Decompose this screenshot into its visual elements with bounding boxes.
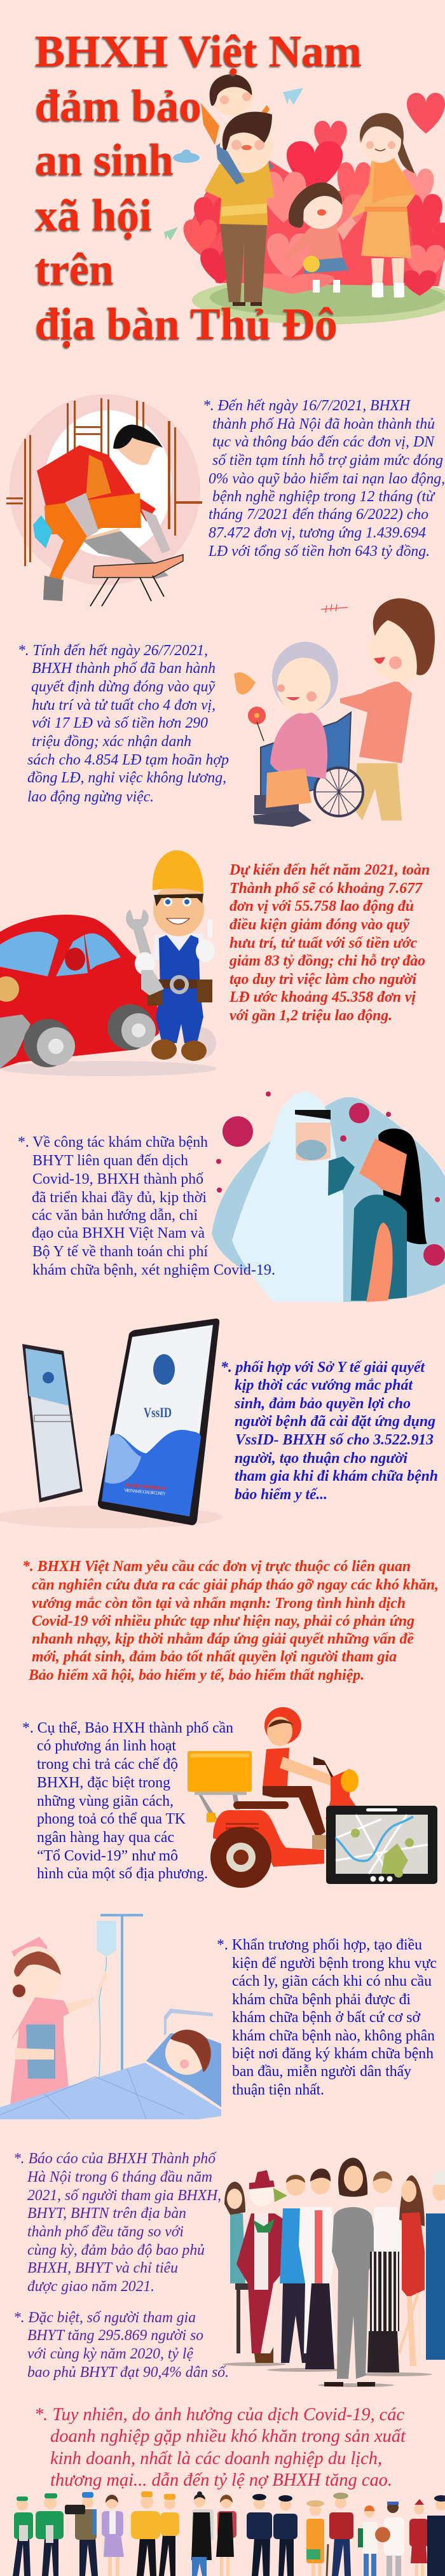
hearts cluster [184, 93, 445, 296]
doctor with white coat [299, 2168, 337, 2369]
text: BHYT coverage: *. Đặc biệt, số người tham gia [13, 2309, 196, 2326]
cook [358, 2505, 378, 2576]
text: urgent coordination: khám chữa bệnh phải được đi [232, 1991, 411, 2008]
red car [0, 915, 159, 1069]
text: 26/7/2021 pension: sách cho 4.854 LĐ tạm hoãn hợp [27, 752, 229, 768]
text: flexible payment: những vùng giãn cách, [37, 1793, 174, 1810]
text: covid treatment: đã triển khai đầy đủ, kịp thời [32, 1189, 207, 1206]
gardener [306, 2500, 324, 2576]
text: BHYT coverage: bao phủ BHYT đạt 90,4% dân số. [27, 2364, 229, 2381]
text: VssID coordination: tham gia khi đi khám chữa bệnh [235, 1468, 438, 1485]
text: 26/7/2021 pension: triệu đồng; xác nhận danh [32, 733, 191, 750]
police officer 2 [273, 2495, 298, 2576]
text: 6-month report: BHXH, BHYT và chỉ tiêu [27, 2260, 178, 2276]
text: urgent coordination: kiện để người bệnh trong khu vực [232, 1955, 437, 1972]
sawhorse [90, 555, 183, 606]
waitress [216, 2495, 236, 2576]
protective suit [232, 1091, 343, 1302]
text: 26/7/2021 pension: với 17 LĐ và số tiền hơn 290 [32, 715, 208, 731]
text: 26/7/2021 pension: lao động ngừng việc. [27, 789, 154, 805]
chef with striped apron [367, 2171, 406, 2372]
text: BHXH Vietnam request: Bảo hiểm xã hội, bảo hiểm y tế, bảo hiểm thất nghiệp. [28, 1667, 364, 1684]
father [205, 112, 274, 306]
text: 16/7/2021 support: 87.472 đơn vị, tương ứng 1.439.694 [209, 525, 426, 541]
text: 6-month report: thành phố đều tăng so với [27, 2224, 184, 2240]
text: BHYT coverage [13, 2309, 229, 2381]
illustration: row of workers [13, 2491, 445, 2576]
text: urgent coordination: cách ly, giãn cách khi có nhu cầu [232, 1973, 432, 1990]
text: 16/7/2021 support: 0% vào quỹ bảo hiểm tai nạn lao động, [209, 471, 445, 487]
police officer 1 [247, 2494, 272, 2576]
text: 6-month report: Hà Nội trong 6 tháng đầu năm [27, 2169, 212, 2185]
paper planes and cloud [164, 88, 303, 240]
text: urgent coordination: thuận tiện nhất. [232, 2082, 324, 2098]
IV stand [97, 1914, 143, 2077]
wheelchair [253, 712, 363, 827]
text: 16/7/2021 support: bệnh nghề nghiệp trong 12 tháng (từ [212, 488, 435, 505]
worker: yellow shirt 1 [131, 2491, 160, 2576]
text: VssID coordination [221, 1359, 438, 1503]
illustration: happy family [164, 73, 445, 324]
text: BHXH Vietnam request: *. BHXH Việt Nam yêu cầu các đơn vị trực thuộc có liên quan [22, 1558, 411, 1575]
text: BHXH Vietnam request: Covid-19 với nhiều phức tạp như hiện nay, phải có phản ứng [32, 1613, 414, 1630]
text: flexible payment: BHXH, đặc biệt trong [37, 1775, 170, 1791]
text: 16/7/2021 support [203, 398, 445, 560]
text: 16/7/2021 support: tháng 7/2021 đến tháng 6/2022) cho [209, 506, 428, 523]
worker: yellow shirt 2 [159, 2494, 179, 2576]
shadow under car [0, 1027, 216, 1076]
text: flexible payment: phong toả có thể qua TK [37, 1811, 186, 1827]
caregiver [340, 599, 435, 821]
text: covid treatment: *. Về công tác khám chữa bệnh [18, 1134, 208, 1151]
text: VssID coordination: VssID- BHXH số cho 3.522.913 [235, 1432, 434, 1448]
text: 16/7/2021 support: *. Đến hết ngày 16/7/2021, BHXH [203, 398, 411, 414]
text: BHXH Vietnam request: cần nghiên cứu đưa ra các giải pháp tháo gỡ ngay các khó khăn, [32, 1577, 439, 1593]
text: debt conclusion: *. Tuy nhiên, do ảnh hưởng của dịch Covid-19, các [34, 2405, 405, 2425]
text: BHYT coverage: BHYT tăng 295.869 người so [27, 2327, 203, 2344]
text: BHXH Vietnam request: mới, phát sinh, đảm bảo tốt nhất quyền lợi người tham gia [32, 1649, 397, 1665]
tablet: BẢO HIỂM XÃ HỘI VIỆT NAM [125, 1483, 168, 1492]
text: 6-month report: cùng kỳ, đảm bảo độ bao phủ [27, 2242, 205, 2259]
text: VssID coordination: người bệnh đã cài đặt ứng dụng [235, 1413, 435, 1430]
text: BHXH Vietnam request [22, 1558, 439, 1684]
text: debt conclusion: thương mại... dẫn đến tỷ lệ nợ BHXH tăng cao. [50, 2470, 392, 2490]
patient in bed [0, 2030, 221, 2119]
text: BHXH Vietnam request: nhanh nhạy, kịp thời nhằm đáp ứng giải quyết những vấn đề [32, 1631, 414, 1647]
basketball player [375, 2502, 404, 2576]
text: 6-month report [13, 2150, 221, 2295]
text: 6-month report: BHYT, BHTN trên địa bàn [27, 2205, 186, 2222]
text: VssID coordination: bảo hiểm y tế... [235, 1486, 327, 1503]
text: forecast to end of 2021: điều kiện giảm đóng vào quỹ [229, 917, 410, 933]
title: an sinh [35, 135, 174, 185]
wooden frame [6, 398, 202, 566]
daughter [285, 183, 356, 293]
reporter [102, 2495, 124, 2576]
text: flexible payment: *. Cụ thể, Bảo HXH thành phố cần [22, 1720, 233, 1736]
illustration: VssID phone and tablet [0, 1319, 222, 1528]
tablet: VIETNAM SOCIAL SECURITY [124, 1488, 166, 1497]
worker: green uniform 2 [36, 2493, 64, 2576]
illustration: group of professionals [222, 2157, 445, 2387]
text: covid treatment: Bộ Y tế về thanh toán chi phí [32, 1243, 208, 1260]
barista [191, 2491, 214, 2576]
text: urgent coordination [217, 1937, 437, 2098]
text: 6-month report: được giao năm 2021. [27, 2278, 154, 2295]
text: 26/7/2021 pension: quyết định dừng đóng vào quỹ [31, 679, 216, 695]
text: forecast to end of 2021: giảm 83 tỷ đồng; chi hỗ trợ đào [229, 953, 425, 969]
tablet: VssID [144, 1404, 172, 1420]
flight attendant [409, 2499, 428, 2576]
text: urgent coordination: khám chữa bệnh nào, không phân [232, 2028, 435, 2044]
title: xã hội [35, 191, 152, 240]
text: 6-month report: 2021, số người tham gia BHXH, [27, 2187, 221, 2204]
illustration: caregiver with elderly woman in wheelchair [234, 599, 435, 827]
text: flexible payment: “Tổ Covid-19” như mô [37, 1848, 178, 1864]
text: 6-month report: *. Báo cáo của BHXH Thành phố [13, 2150, 217, 2167]
text: forecast to end of 2021 [229, 862, 430, 1024]
text: covid treatment: Covid-19, BHXH thành phố [32, 1171, 203, 1188]
text: 16/7/2021 support: LĐ với tổng số tiền hơn 643 tỷ đồng. [208, 543, 430, 560]
text: covid treatment: đạo của BHXH Việt Nam và [32, 1225, 205, 1242]
mechanic [126, 850, 215, 1061]
illustration: covid test [212, 1091, 445, 1302]
illustration: delivery scooter and map tablet [188, 1707, 437, 1888]
text: BHXH Vietnam request: vướng mắc còn tồn tại và nhấn mạnh: Trong tình hình dịch [32, 1595, 406, 1612]
man in blue shirt [280, 2175, 306, 2363]
title: trên [35, 245, 114, 294]
patient [351, 1128, 427, 1302]
woman with glasses [224, 2182, 250, 2353]
text: 16/7/2021 support: thành phố Hà Nội đã hoàn thành thủ [212, 416, 435, 433]
text: covid treatment [18, 1134, 275, 1278]
grass mound [192, 276, 445, 324]
worker: green uniform 1 [13, 2496, 33, 2576]
text: 26/7/2021 pension: BHXH thành phố đã ban hành [32, 660, 216, 677]
tablet [98, 1319, 219, 1525]
text: VssID coordination: sinh, đảm bảo quyền lợi cho [234, 1395, 411, 1412]
virus particles [216, 1091, 445, 1266]
butterfly and flower [234, 672, 266, 741]
title: đảm bảo [35, 81, 202, 131]
text: forecast to end of 2021: LĐ ước khoảng 45.358 đơn vị [229, 989, 416, 1006]
nurse [8, 1937, 108, 2104]
text: 26/7/2021 pension: đồng LĐ, nghỉ việc không lương, [27, 770, 226, 786]
text: VssID coordination: kịp thời các vướng mắc phát [235, 1377, 413, 1394]
illustration: mechanic and red car [0, 850, 216, 1076]
illustration: nurse and hospital patient [0, 1914, 221, 2119]
text: forecast to end of 2021: Thành phố sẽ có khoảng 7.677 [229, 880, 423, 897]
text: forecast to end of 2021: hưu trí, tử tuất với số tiền ước [229, 935, 417, 952]
text: flexible payment: trong chi trả các chế độ [37, 1756, 178, 1773]
text: debt conclusion: doanh nghiệp gặp nhiều khó khăn trong sản xuất [50, 2427, 406, 2446]
farmer in plaid [327, 2493, 353, 2576]
text: 26/7/2021 pension: *. Tính đến hết ngày 26/7/2021, [18, 642, 208, 659]
child on shoulders [201, 73, 273, 191]
text: urgent coordination: *. Khẩn trương phối hợp, tạo điều [217, 1937, 422, 1953]
text: covid treatment: BHYT liên quan đến dịch [32, 1153, 188, 1169]
text: VssID coordination: người, tạo thuận cho người [235, 1450, 407, 1467]
text: BHYT coverage: với cùng kỳ năm 2020, tỷ lệ [27, 2346, 193, 2362]
title [35, 27, 362, 349]
delivery box [188, 1751, 252, 1819]
text: urgent coordination: ban đầu, miễn người dân thấy [232, 2063, 411, 2080]
text: debt conclusion [34, 2405, 406, 2490]
rider [263, 1707, 338, 1849]
text: flexible payment: ngân hàng hay qua các [37, 1829, 174, 1846]
man in blue uniform [426, 2172, 445, 2360]
phone [22, 1344, 83, 1502]
text: 26/7/2021 pension [18, 642, 229, 805]
title: địa bàn Thủ Đô [35, 300, 338, 349]
text: urgent coordination: biệt nơi đăng ký khám chữa bệnh [232, 2046, 434, 2062]
pale blue circle [212, 1097, 445, 1302]
bed rail [164, 2009, 213, 2035]
carpenter figure [37, 445, 156, 522]
scooter [207, 1757, 362, 1888]
text: covid treatment: khám chữa bệnh, xét nghiệm Covid-19. [32, 1262, 275, 1278]
text: 26/7/2021 pension: hưu trí và tử tuất cho 4 đơn vị, [32, 697, 216, 714]
photographer [65, 2492, 98, 2576]
illustration: carpenter sawing [6, 394, 202, 606]
text: forecast to end of 2021: với gần 1,2 triệu lao động. [229, 1008, 392, 1024]
mother [348, 113, 416, 298]
title: BHXH Việt Nam [35, 27, 362, 76]
woman in red dress [398, 2175, 425, 2366]
map tablet [326, 1806, 437, 1884]
text: forecast to end of 2021: Dự kiến đến hết năm 2021, toàn [229, 862, 430, 878]
text: VssID coordination: *. phối hợp với Sở Y tế giải quyết [221, 1359, 425, 1376]
elderly woman [266, 642, 338, 808]
text: forecast to end of 2021: đơn vị với 55.758 lao động đủ [229, 898, 414, 915]
text: flexible payment: có phương án linh hoạt [37, 1738, 176, 1754]
text: urgent coordination: khám chữa bệnh ở bất cứ cơ sở [232, 2009, 420, 2026]
text: flexible payment [22, 1720, 233, 1882]
airline pilot [427, 2495, 445, 2576]
pilot [324, 2157, 378, 2386]
clown [236, 2170, 287, 2363]
text: debt conclusion: kinh doanh, nhất là các doanh nghiệp du lịch, [50, 2449, 382, 2469]
text: forecast to end of 2021: tạo duy trì việc làm cho người [229, 971, 416, 988]
text: 16/7/2021 support: tục và thông báo đến các đơn vị, DN [212, 434, 435, 450]
text: covid treatment: các văn bản hướng dẫn, chỉ [32, 1207, 198, 1224]
text: flexible payment: hình của một số địa phương. [37, 1866, 208, 1882]
text: 16/7/2021 support: số tiền tạm tính hỗ trợ giảm mức đóng [212, 452, 443, 469]
